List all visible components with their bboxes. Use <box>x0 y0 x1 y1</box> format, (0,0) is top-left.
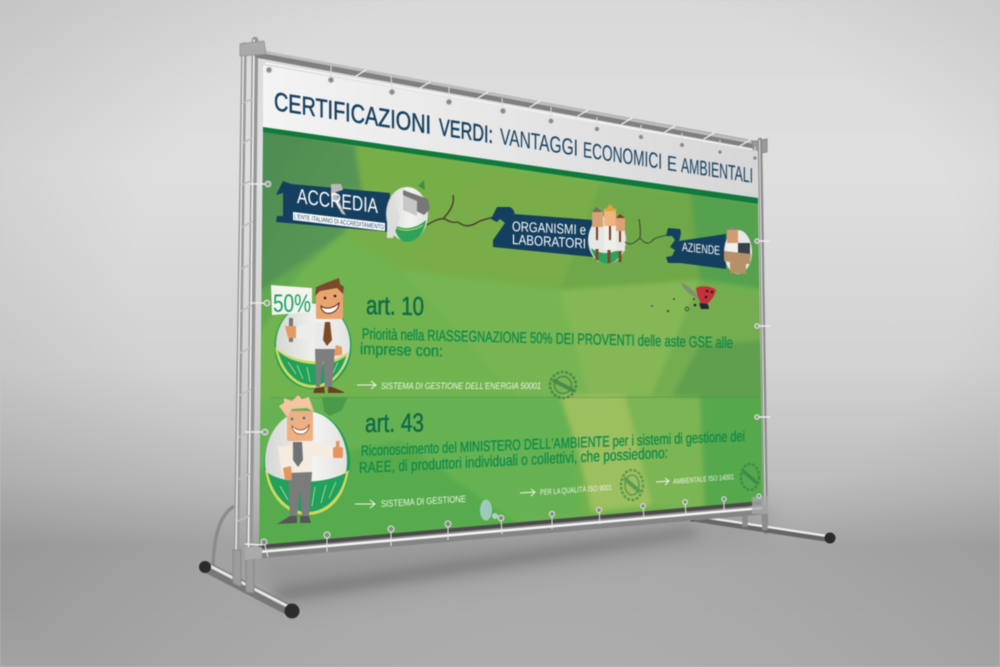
branch <box>427 195 493 226</box>
Accredia label: ACCREDIA <box>297 185 379 218</box>
subtitle strip: L'ENTE ITALIANO DI ACCREDITAMENTO <box>294 214 384 231</box>
title: CERTIFICAZIONI <box>274 86 431 140</box>
Italy map <box>331 184 346 215</box>
section: art. 10 <box>271 278 733 398</box>
banner <box>240 65 780 560</box>
right foot <box>688 505 836 544</box>
water drops <box>480 500 498 520</box>
arrow and ISO 9001 item: PER LA QUALITÀ ISO 9001 <box>540 483 612 497</box>
man <box>285 278 344 393</box>
art. 43 heading: art. 43 <box>365 407 424 438</box>
arrow and ISO 14001 item <box>656 472 734 486</box>
right pole <box>760 140 766 532</box>
banner header white band <box>263 65 758 204</box>
banner green field <box>258 131 764 545</box>
ladybug with trail <box>651 283 716 312</box>
icon: manager at desk <box>724 227 752 274</box>
title: ECONOMICI <box>583 137 662 174</box>
illustration: man with 50% sign <box>271 278 352 393</box>
banner green divider stripe <box>263 127 758 204</box>
title: VANTAGGI <box>500 123 578 161</box>
navy badge with numeral 2 <box>491 207 593 257</box>
icon: camera in circle <box>386 180 430 242</box>
title: E <box>667 152 677 176</box>
arrow and management system item <box>355 494 466 510</box>
art. 43 body: Riconoscimento del MINISTERO DELL'AMBIENTE per i sistemi di gestione dei <box>361 428 745 460</box>
stamp: ISO 14001 <box>741 464 759 490</box>
label lines: ORGANISMI e <box>512 218 586 238</box>
step 3: Aziende <box>666 227 752 274</box>
navy badge with numeral 3 <box>666 228 726 269</box>
stand frame <box>199 40 836 618</box>
label lines <box>512 218 586 251</box>
side tie grommets <box>245 181 770 545</box>
title: VERDI: <box>439 114 493 149</box>
arrow and management system item: SISTEMA DI GESTIONE <box>381 494 466 510</box>
top rail <box>240 41 767 154</box>
arrow and ISO 14001 item: AMBIENTALE ISO 14001 <box>673 472 734 486</box>
subtitle strip <box>293 212 385 231</box>
hose <box>213 507 233 566</box>
icon: three men in circle <box>588 204 626 264</box>
leaf circle <box>274 303 352 389</box>
arrow and ISO 50001 item: SISTEMA DI GESTIONE DELL'ENERGIA 50001 <box>381 381 541 391</box>
title <box>274 86 753 188</box>
bottom rail <box>245 496 768 560</box>
title: AMBIENTALI <box>681 154 753 188</box>
navy badge with numeral 1 <box>276 181 390 232</box>
step 2: Organismi e Laboratori <box>491 204 666 264</box>
left ladder poles <box>236 40 255 590</box>
art. 10 body: Priorità nella RIASSEGNAZIONE 50% DEI PROVENTI delle aste GSE alle <box>362 326 733 352</box>
art. 10 heading: art. 10 <box>366 290 424 321</box>
art. 10 body <box>360 326 733 360</box>
sign: 50% <box>273 290 311 318</box>
arrow and ISO 9001 item <box>520 483 612 497</box>
leaf circle <box>264 397 350 515</box>
art. 43 body: RAEE, di produttori individuali o collettivi, che possiedono: <box>359 445 668 477</box>
illustration: man with thumbs up <box>264 395 350 524</box>
man <box>277 395 343 524</box>
grommets and clips along top edge <box>266 66 757 160</box>
grommets and clips along bottom edge <box>261 494 761 557</box>
art. 10 body: imprese con: <box>360 341 443 360</box>
branch <box>625 219 666 244</box>
label lines: LABORATORI <box>512 231 586 251</box>
stamp <box>550 372 576 398</box>
left foot <box>199 550 300 618</box>
section: art. 43 <box>264 395 759 524</box>
label: AZIENDE <box>682 240 720 258</box>
step 1: Accredia <box>276 180 493 242</box>
stamp: ISO 9001 <box>621 470 643 500</box>
